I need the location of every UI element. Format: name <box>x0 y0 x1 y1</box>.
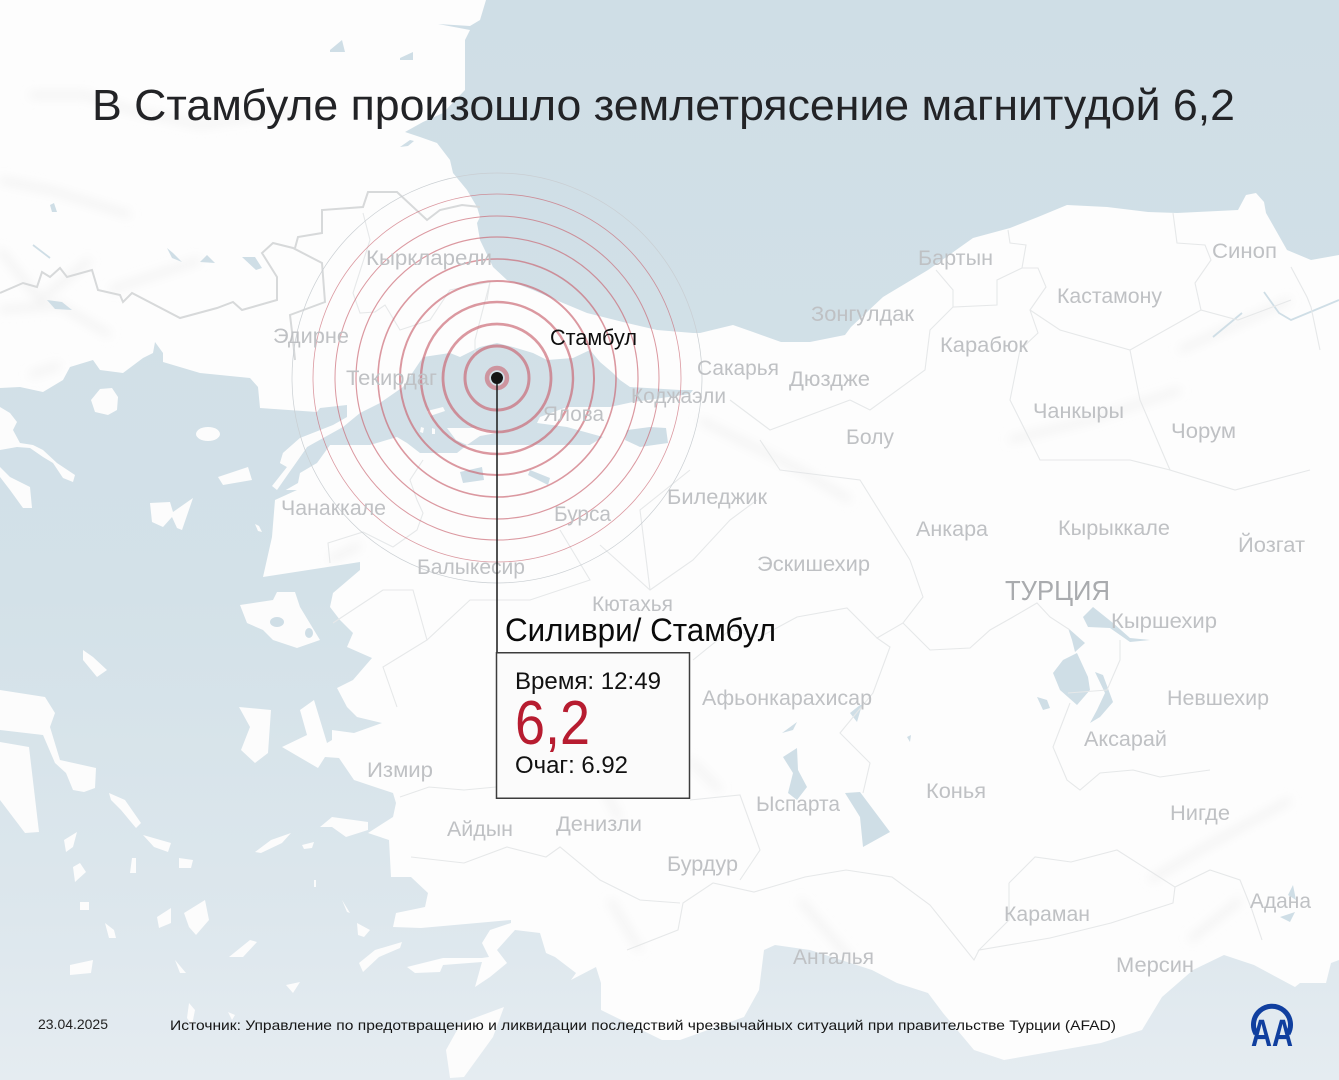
label: Canakkale: Чанаккале <box>281 497 386 520</box>
terrain relief shading <box>0 95 1290 970</box>
time: Время: 12:49 <box>515 668 661 695</box>
label: Mersin: Мерсин <box>1116 954 1194 977</box>
label: Zonguldak: Зонгулдак <box>811 303 915 326</box>
label: Yozgat: Йозгат <box>1238 533 1305 557</box>
label: Edirne: Эдирне <box>273 325 349 348</box>
label: Karaman: Караман <box>1004 903 1090 926</box>
label: Kastamonu: Кастамону <box>1057 285 1163 308</box>
label: Nigde: Нигде <box>1170 802 1230 825</box>
label: Aydin: Айдын <box>447 818 513 841</box>
label: Kutahya: Кютахья <box>592 593 673 616</box>
rivers <box>33 245 1339 337</box>
label: Corum: Чорум <box>1171 420 1236 443</box>
national borders <box>0 192 480 360</box>
label: Burdur: Бурдур <box>667 853 738 876</box>
label: Antalya: Анталья <box>793 946 874 969</box>
label: Cankiri: Чанкыры <box>1033 400 1124 423</box>
callout leader line <box>496 378 498 654</box>
sea: Aegean and Mediterranean <box>0 342 1339 1080</box>
icon: Anadolu Agency logo: AA <box>1251 1013 1293 1055</box>
label: Bartin: Бартын <box>918 247 993 270</box>
province borders <box>328 213 1320 960</box>
city label: Istanbul: Стамбул <box>550 325 637 350</box>
callout box <box>496 653 690 798</box>
label: Denizli: Денизли <box>556 813 642 836</box>
label: Kirikkale: Кырыккале <box>1058 517 1170 540</box>
province labels <box>273 240 1311 977</box>
label: Bolu: Болу <box>846 426 894 449</box>
label: Konya: Конья <box>926 780 986 803</box>
label: Sinop: Синоп <box>1212 240 1277 263</box>
label: Isparta: Ыспарта <box>756 793 840 816</box>
title: В Стамбуле произошло землетрясение магнитудой 6,2 <box>92 81 1235 130</box>
label: Yalova: Ялова <box>543 403 604 426</box>
label: Izmir: Измир <box>367 759 433 782</box>
label: Nevsehir: Невшехир <box>1167 687 1269 710</box>
label: Kocaeli: Коджаэли <box>631 385 726 408</box>
label: Duzce: Дюздже <box>789 368 870 391</box>
label: Kirsehir: Кыршехир <box>1111 610 1217 633</box>
epicentre dot <box>491 372 503 384</box>
country label: Turkey: ТУРЦИЯ <box>1005 575 1110 606</box>
magnitude: 6,2 <box>515 689 590 758</box>
inland lakes <box>47 40 1296 922</box>
source: Источник: Управление по предотвращению и ликвидации последствий чрезвычайных ситуаций при правительстве Турции (AFAD) <box>170 1017 1116 1033</box>
label: Adana: Адана <box>1250 890 1311 913</box>
label: Kirklareli: Кыркларели <box>366 247 492 270</box>
label: Aksaray: Аксарай <box>1084 728 1167 751</box>
epicentre location heading: Силиври/ Стамбул <box>505 612 776 648</box>
islands and peninsulas <box>0 388 504 1078</box>
label: Bilecik: Биледжик <box>667 486 768 509</box>
label: Balikesir: Балыкесир <box>417 556 525 579</box>
depth: Очаг: 6.92 <box>515 752 628 779</box>
icon: Anadolu Agency logo <box>1251 1006 1293 1055</box>
sea: Marmara and Dardanelles <box>270 343 693 495</box>
label: Afyonkarahisar: Афьонкарахисар <box>702 687 872 710</box>
label: Ankara: Анкара <box>916 518 988 541</box>
label: Karabuk: Карабюк <box>940 334 1029 357</box>
label: Sakarya: Сакарья <box>697 357 779 380</box>
label: Bursa: Бурса <box>554 503 611 526</box>
label: Eskisehir: Эскишехир <box>757 553 870 576</box>
earthquake rings <box>292 173 702 583</box>
date: 23.04.2025 <box>38 1017 108 1032</box>
sea: Black Sea <box>405 0 1339 342</box>
label: Tekirdag: Текирдаг <box>346 367 437 390</box>
